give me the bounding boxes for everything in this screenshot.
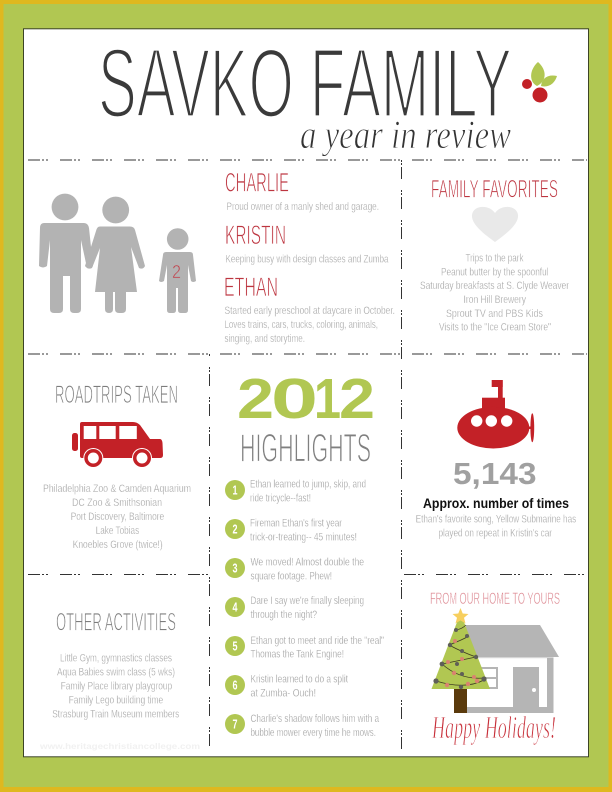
- icon: heart: [472, 207, 518, 242]
- highlight 7: [225, 713, 380, 739]
- list: activities: Little Gym, gymnastics classes: [60, 652, 172, 664]
- highlight 5: Thomas the Tank Engine!: [250, 649, 344, 661]
- panel: holiday greeting: [430, 590, 560, 745]
- statistic label: Approx. number of times: [423, 495, 569, 511]
- list: favorites: Saturday breakfasts at S. Clyde Weaver: [420, 280, 569, 292]
- icon: christmas tree: [432, 608, 490, 713]
- child number: 2: [172, 262, 181, 282]
- highlight 3: [225, 557, 364, 583]
- list: activities: Family Lego building time: [69, 694, 163, 706]
- list: activities: Strasburg Train Museum members: [52, 708, 180, 720]
- list: favorites: Visits to the "Ice Cream Store": [439, 322, 551, 334]
- figure: child: [159, 228, 196, 313]
- highlight 7: bubble mower every time he mows.: [250, 727, 376, 739]
- highlight 1: [225, 479, 366, 505]
- icon: red van: [72, 422, 163, 468]
- heading: 2012: 2: [339, 367, 375, 431]
- heading: roadtrips taken: ROADTRIPS TAKEN: [55, 381, 178, 409]
- subtitle: a year in review: [300, 112, 511, 157]
- highlight 2: 2: [232, 522, 238, 536]
- highlight 1: 1: [232, 484, 238, 498]
- icon: family figures: [39, 194, 196, 313]
- panel: yellow submarine stat: [416, 380, 577, 540]
- highlight 4: Dare I say we're finally sleeping: [250, 595, 364, 607]
- heading: 2012: 1: [314, 367, 341, 431]
- text: song description: played on repeat in Kristin's car: [438, 528, 552, 540]
- highlight 4: through the night?: [250, 609, 317, 621]
- list: favorites: Iron Hill Brewery: [464, 294, 526, 306]
- heading: 2012: 0: [271, 367, 318, 431]
- watermark: www.heritagechristiancollege.com: [39, 741, 200, 751]
- highlight 7: 7: [232, 718, 238, 732]
- highlight 6: at Zumba- Ouch!: [250, 688, 316, 700]
- highlight 5: [225, 635, 384, 661]
- heading: Ethan: ETHAN: [224, 272, 278, 302]
- list: roadtrips: Lake Tobias: [96, 525, 140, 537]
- highlight 6: Kristin learned to do a split: [250, 674, 349, 686]
- list: roadtrips: Philadelphia Zoo & Camden Aquarium: [43, 483, 191, 495]
- icon: red submarine: [457, 380, 534, 449]
- list: activities: Family Place library playgroup: [61, 680, 172, 692]
- panel: 2012 highlights: [225, 367, 384, 739]
- list: favorites: Trips to the park: [466, 252, 524, 264]
- heading: 2012: 2: [237, 367, 274, 431]
- text: Ethan description: Started early preschool at daycare in October.: [224, 305, 395, 317]
- highlight 3: square footage. Phew!: [250, 571, 332, 583]
- highlight 4: 4: [232, 600, 238, 614]
- highlight 2: [225, 518, 357, 544]
- icon: house: [466, 625, 559, 713]
- list: activities: [52, 652, 180, 720]
- panel: other activities: [39, 608, 200, 751]
- icon: berries and leaves: [522, 62, 557, 102]
- heading: Kristin: KRISTIN: [225, 220, 286, 250]
- highlight 1: Ethan learned to jump, skip, and: [250, 479, 366, 491]
- highlight 2: trick-or-treating-- 45 minutes!: [250, 532, 357, 544]
- list: roadtrips: Port Discovery, Baltimore: [71, 511, 164, 523]
- figure: mother: [85, 197, 145, 313]
- highlight 4: [225, 595, 364, 621]
- heading: highlights: HIGHLIGHTS: [240, 426, 371, 470]
- list: activities: Aqua Babies swim class (5 wks): [57, 666, 175, 678]
- highlight 3: 3: [232, 562, 238, 576]
- text: Charlie description: Proud owner of a manly shed and garage.: [226, 201, 379, 213]
- highlight 6: [225, 674, 349, 700]
- list: roadtrips: Knoebles Grove (twice!): [73, 539, 163, 551]
- text: Ethan description: [224, 305, 395, 345]
- highlight 1: ride tricycle--fast!: [250, 493, 311, 505]
- highlight 2: Fireman Ethan's first year: [250, 518, 342, 530]
- figure: father: [39, 194, 93, 313]
- highlight 5: Ethan got to meet and ride the "real": [250, 635, 384, 647]
- highlight 5: 5: [232, 640, 238, 654]
- heading: other activities: OTHER ACTIVITIES: [56, 608, 176, 636]
- list: roadtrips: DC Zoo & Smithsonian: [72, 497, 162, 509]
- panel: family members: [224, 168, 395, 345]
- list: favorites: Peanut butter by the spoonful: [441, 266, 548, 278]
- highlight 7: Charlie's shadow follows him with a: [250, 713, 380, 725]
- list: favorites: Sprout TV and PBS Kids: [446, 308, 543, 320]
- text: song description: [416, 514, 577, 540]
- highlight 6: 6: [232, 678, 238, 692]
- text: Ethan description: Loves trains, cars, trucks, coloring, animals,: [224, 319, 378, 331]
- highlight 3: We moved! Almost double the: [250, 557, 364, 569]
- text: Ethan description: singing, and storytime.: [224, 333, 305, 345]
- panel: roadtrips taken: [43, 381, 191, 551]
- list: favorites: [420, 252, 569, 334]
- panel: family favorites: [420, 176, 569, 334]
- text: Kristin description: Keeping busy with design classes and Zumba: [226, 254, 389, 266]
- statistic: 5,143: 5,143: [453, 456, 536, 491]
- list: roadtrips: [43, 483, 191, 551]
- heading: Charlie: CHARLIE: [225, 168, 289, 198]
